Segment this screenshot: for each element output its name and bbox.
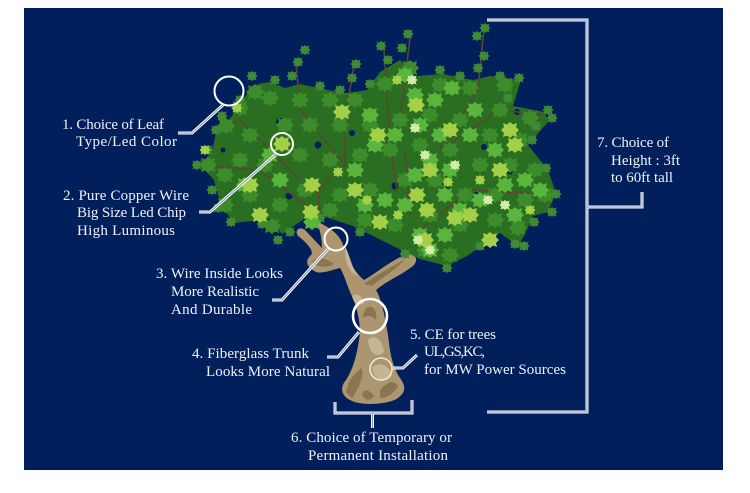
callout 4: leader and circle <box>327 299 387 357</box>
label 2: Big Size Led Chip <box>77 205 186 221</box>
label 6: 6. Choice of Temporary or <box>291 430 452 446</box>
bracket 7: height bracket <box>487 20 642 412</box>
trunk <box>297 220 416 404</box>
label 4: Looks More Natural <box>206 364 330 380</box>
label 3 <box>156 266 283 318</box>
label 7: to 60ft tall <box>611 170 673 186</box>
canopy: bright green leaves <box>236 67 549 258</box>
tree illustration <box>192 23 562 404</box>
label 5: UL,GS,KC, <box>424 344 485 360</box>
canopy: foliage mass <box>200 60 556 266</box>
label 2 <box>63 188 189 239</box>
label 2: High Luminous <box>77 223 175 239</box>
callout 3: leader and circle <box>272 228 348 300</box>
callout 2: leader and circle <box>199 133 293 212</box>
trunk: bark highlights <box>345 246 392 380</box>
label 5: for MW Power Sources <box>424 362 566 378</box>
label 2: 2. Pure Copper Wire <box>63 188 189 204</box>
callout 5: leader and circle <box>370 355 417 380</box>
canopy: branches <box>200 28 555 230</box>
canopy: pale highlight leaves <box>406 75 510 255</box>
bracket 6: base bracket <box>335 400 412 428</box>
callout 1: leader and circle <box>178 76 244 133</box>
label 3: 3. Wire Inside Looks <box>156 266 283 282</box>
canopy: tip leaves on long branches <box>192 23 562 273</box>
label 6 <box>291 430 452 464</box>
label 1: Type/Led Color <box>76 134 177 150</box>
label 5 <box>410 327 566 378</box>
label 3: More Realistic <box>171 284 259 300</box>
canopy: navy gaps <box>220 109 520 200</box>
label 4: 4. Fiberglass Trunk <box>192 346 310 362</box>
label 7: Height : 3ft <box>611 153 681 169</box>
canopy: mid leaves <box>199 60 554 263</box>
trunk: bark shading <box>312 258 404 400</box>
label 1: 1. Choice of Leaf <box>62 117 164 133</box>
label 7: 7. Choice of <box>597 135 669 151</box>
canopy: light leaves <box>200 75 536 248</box>
label 6: Permanent Installation <box>308 448 448 464</box>
label 7 <box>597 135 681 186</box>
label 5: 5. CE for trees <box>410 327 496 343</box>
label 1 <box>62 117 177 150</box>
label 3: And Durable <box>171 302 252 318</box>
label 4 <box>192 346 330 380</box>
